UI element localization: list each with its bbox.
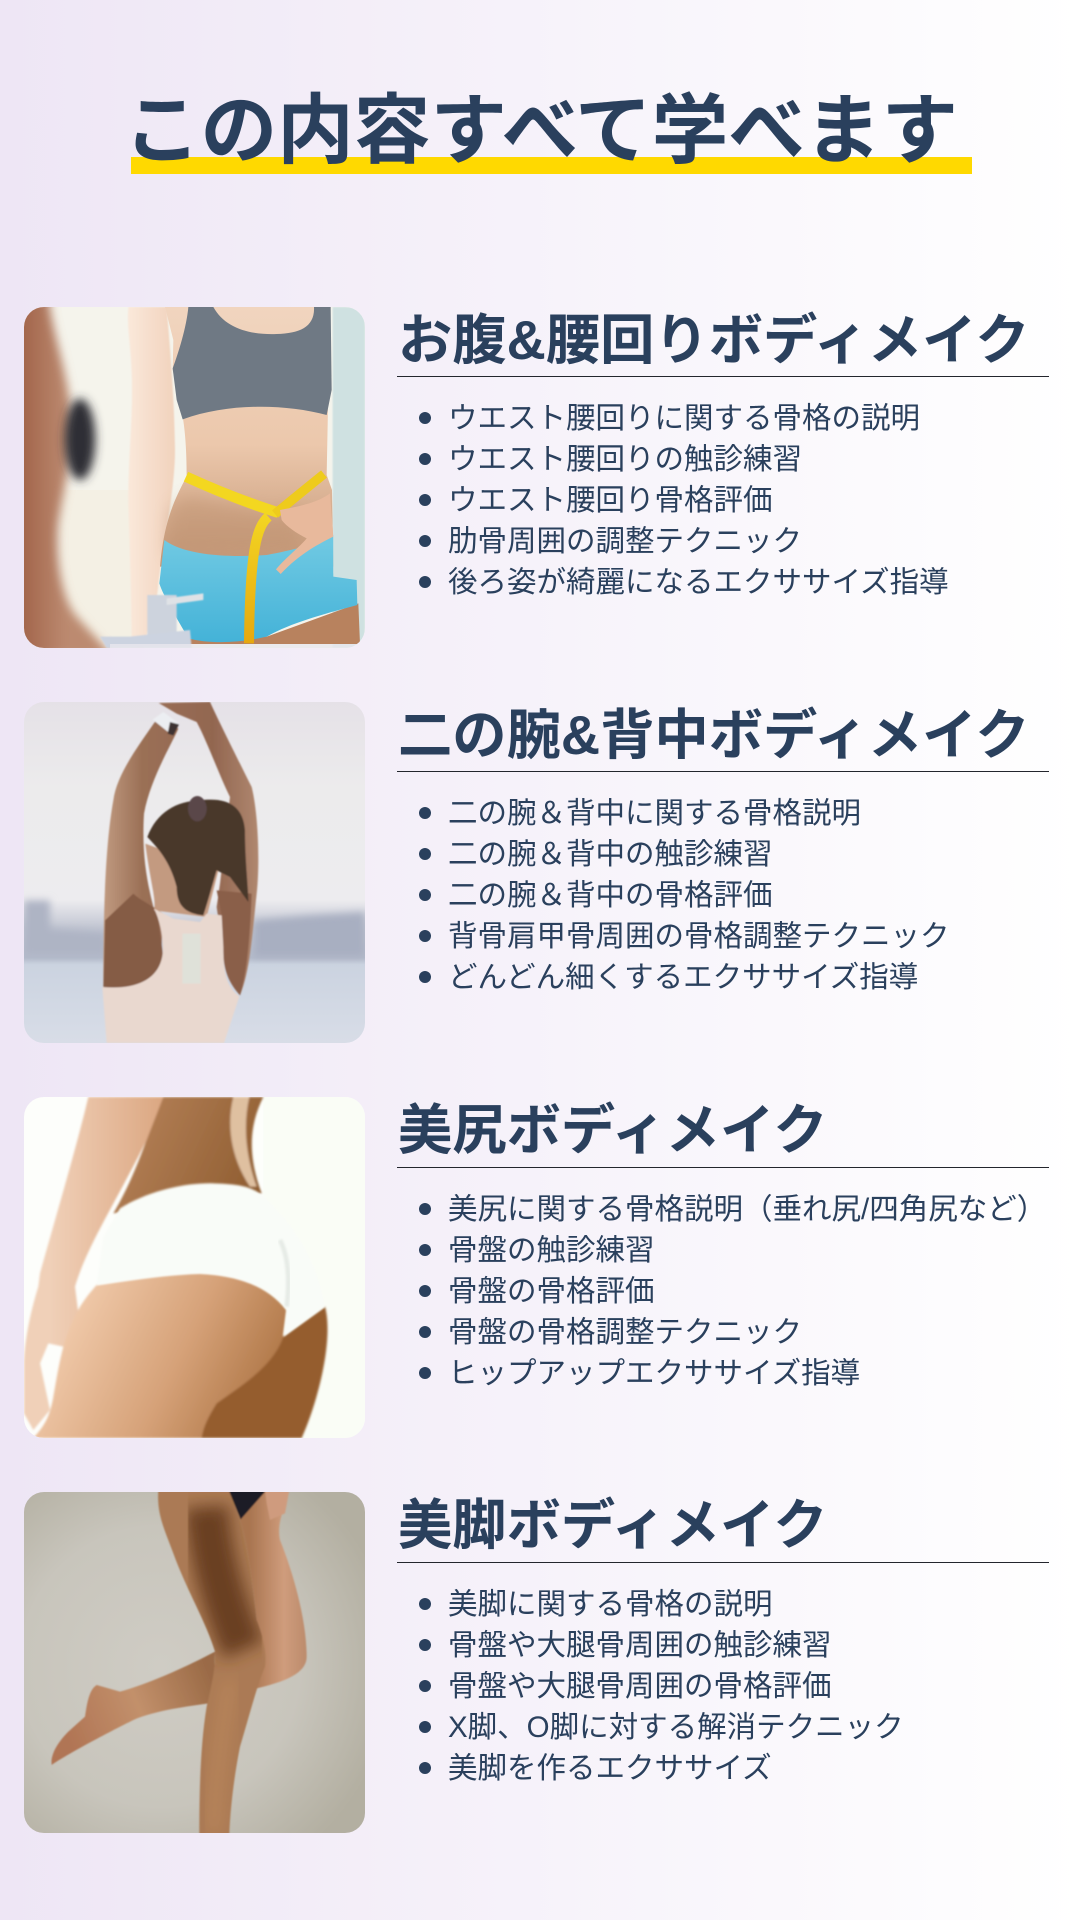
list: 後ろ姿が綺麗になるエクササイズ指導 <box>448 566 949 599</box>
panel: hips <box>24 1097 1049 1438</box>
thighs <box>187 603 360 644</box>
list: 美脚に関する骨格の説明 <box>448 1588 773 1621</box>
bottle <box>147 595 177 645</box>
list: 骨盤の触診練習 <box>448 1234 655 1267</box>
list: 骨盤や大腿骨周囲の触診練習 <box>448 1629 832 1662</box>
raised shin and foot <box>51 1652 215 1765</box>
back <box>103 894 163 989</box>
list: 骨盤の骨格調整テクニック <box>448 1316 802 1349</box>
list: ヒップアップエクササイズ指導 <box>448 1357 860 1390</box>
list <box>419 402 949 599</box>
hand <box>265 1490 289 1520</box>
scrunchie <box>188 796 207 821</box>
front leg <box>158 1490 265 1835</box>
panel: legs <box>24 1492 1049 1833</box>
neck <box>145 844 218 917</box>
list: 美尻に関する骨格説明（垂れ尻/四角尻など） <box>448 1193 1046 1226</box>
heading: 二の腕&背中ボディメイク <box>398 705 1030 766</box>
list <box>419 1588 904 1785</box>
heading: 美脚ボディメイク <box>398 1495 828 1556</box>
watch <box>153 712 179 736</box>
torso <box>160 307 333 567</box>
arm <box>128 307 175 648</box>
list: 背骨肩甲骨周囲の骨格調整テクニック <box>448 920 950 953</box>
photo: legs with raised foot <box>24 1492 365 1833</box>
list <box>419 1193 1046 1390</box>
torso <box>113 1097 263 1213</box>
list: X脚、O脚に対する解消テクニック <box>448 1711 904 1744</box>
panel: abdomen and waist <box>24 307 1049 648</box>
right arm and hands <box>159 702 258 995</box>
list: ウエスト腰回り骨格評価 <box>448 484 773 517</box>
photo: waist with measuring tape <box>24 307 365 648</box>
list: 二の腕＆背中の骨格評価 <box>448 879 773 912</box>
thigh shadow <box>207 1507 243 1650</box>
arm <box>24 1097 163 1430</box>
back leg <box>230 1490 307 1688</box>
list: 骨盤や大腿骨周囲の骨格評価 <box>448 1670 832 1703</box>
title: この内容すべて学べます <box>124 89 958 174</box>
shin highlight <box>213 1680 230 1833</box>
briefs <box>229 1490 267 1519</box>
list: ウエスト腰回りに関する骨格の説明 <box>448 402 920 435</box>
near thigh <box>33 1273 287 1438</box>
list: 肋骨周囲の調整テクニック <box>448 525 802 558</box>
list <box>419 797 950 994</box>
sports bra <box>173 307 332 419</box>
far thigh <box>187 1307 328 1438</box>
list: 美脚を作るエクササイズ <box>448 1752 772 1785</box>
hair <box>147 800 248 915</box>
list: 二の腕＆背中に関する骨格説明 <box>448 797 861 830</box>
list: ウエスト腰回りの触診練習 <box>448 443 802 476</box>
shorts <box>159 535 357 642</box>
left arm <box>103 717 178 989</box>
panel: upper arm and back <box>24 702 1049 1043</box>
heading: 美尻ボディメイク <box>398 1100 828 1161</box>
list: 二の腕＆背中の触診練習 <box>448 838 773 871</box>
photo: hips in white shorts <box>24 1097 365 1438</box>
white shorts <box>97 1183 325 1337</box>
list: どんどん細くするエクササイズ指導 <box>448 961 918 994</box>
tank top <box>102 909 239 1043</box>
photo: woman stretching arms overhead <box>24 702 365 1043</box>
list: 骨盤の骨格評価 <box>448 1275 655 1308</box>
hand <box>276 493 333 574</box>
measuring tape <box>186 477 278 513</box>
heading: お腹&腰回りボディメイク <box>398 310 1030 371</box>
